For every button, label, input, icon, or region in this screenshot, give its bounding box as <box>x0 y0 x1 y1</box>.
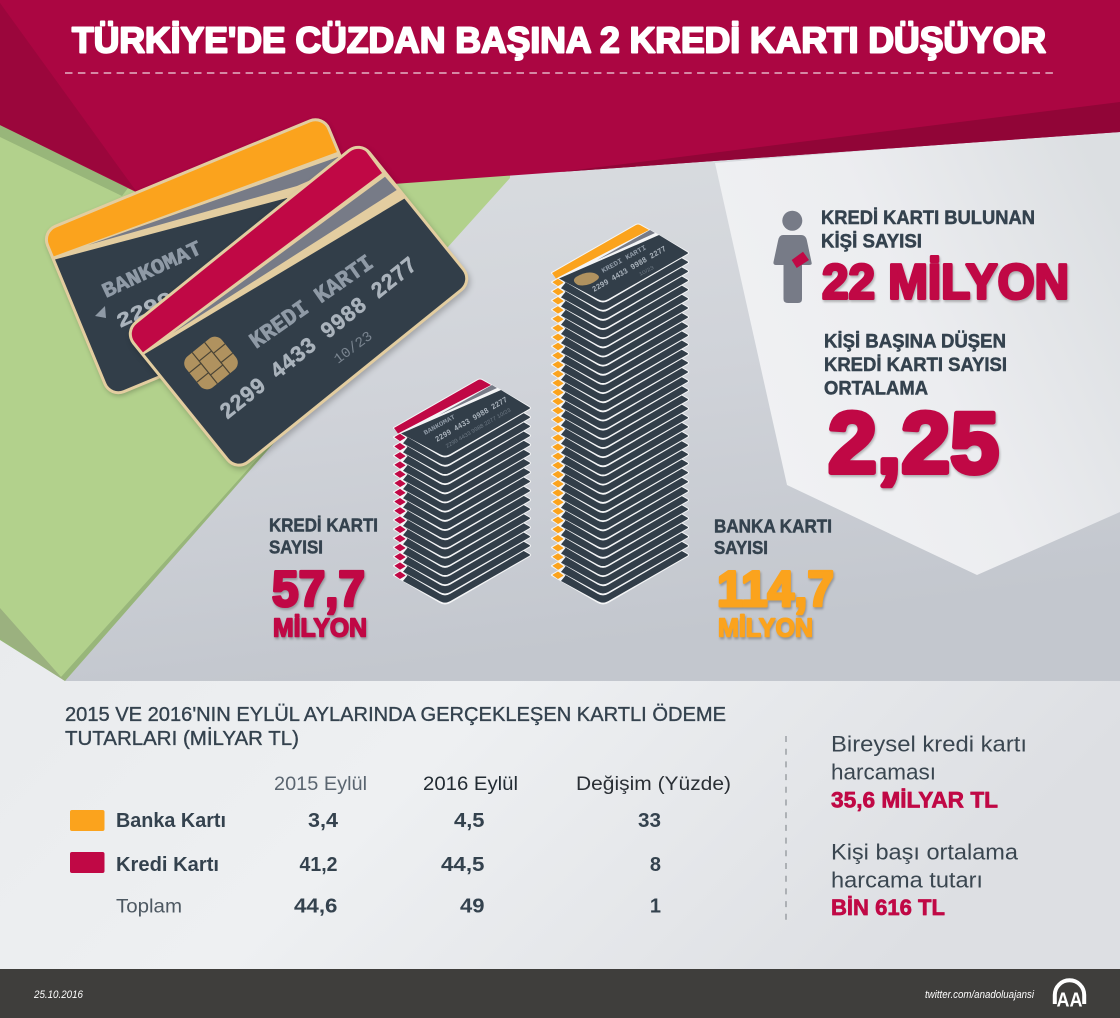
table: card payments: 2016 Eylül <box>423 774 518 795</box>
block: credit card count: SAYISI <box>269 536 323 558</box>
table: card payments: 4,5 <box>454 810 484 832</box>
block: individual credit card spending: 35,6 MİLYAR TL <box>831 788 998 812</box>
block: bank card count: SAYISI <box>714 537 768 558</box>
table: card payments: 8 <box>650 854 661 876</box>
illustration: credit card (red) <box>128 146 472 472</box>
top card of credit stack: 2299 4433 9988 2277 10/23 <box>445 408 512 450</box>
block: cards per person: KREDİ KARTI SAYISI <box>824 353 1007 376</box>
table: card payments: 41,2 <box>300 854 338 876</box>
block: cards per person: 2,25 <box>828 396 999 492</box>
block: average spending per person: BİN 616 TL <box>831 895 945 920</box>
block: credit card count <box>269 514 378 642</box>
block: cardholders: 22 MİLYON <box>822 256 1069 310</box>
top card of credit stack: 2299 4433 9988 2277 <box>434 396 510 445</box>
heading: payments table: 2015 VE 2016'NIN EYLÜL AYLARINDA GERÇEKLEŞEN KARTLI ÖDEME <box>65 704 726 726</box>
block: bank card count: BANKA KARTI <box>714 516 832 536</box>
block: individual credit card spending <box>831 732 1027 812</box>
table: card payments: Toplam <box>116 896 182 918</box>
block: average spending per person: Kişi başı ortalama <box>831 840 1019 864</box>
background: green polygon <box>0 122 512 681</box>
block: bank card count: 114,7 <box>717 561 834 617</box>
block: credit card count: 57,7 <box>272 561 365 617</box>
card chip <box>181 333 241 393</box>
chart: bank card stack <box>552 224 688 604</box>
icon: agency logo <box>1055 980 1084 1012</box>
icon: agency logo: AA <box>1056 990 1082 1012</box>
footer bar <box>0 969 1120 1018</box>
top card of credit stack: BANKOMAT <box>423 414 457 437</box>
block: cards per person: KİŞİ BAŞINA DÜŞEN <box>824 330 1006 352</box>
table: card payments: 44,5 <box>441 854 484 876</box>
legend swatch: credit card <box>70 852 104 873</box>
top card of bank stack: 10/23 <box>638 265 655 278</box>
block: cards per person <box>824 330 1007 492</box>
background: lower light panel <box>0 630 1120 970</box>
block: credit card count: MİLYON <box>273 612 367 642</box>
table: card payments: 2015 Eylül <box>274 774 367 795</box>
heading: payments table: TUTARLARI (MİLYAR TL) <box>65 727 299 750</box>
top card of bank stack: 2299 4433 9988 2277 <box>591 245 668 295</box>
title: TÜRKİYE'DE CÜZDAN BAŞINA 2 KREDİ KARTI DÜŞÜYOR <box>72 20 1046 60</box>
block: cardholders <box>821 206 1069 310</box>
table: card payments: Değişim (Yüzde) <box>576 774 731 795</box>
block: cardholders: KİŞİ SAYISI <box>821 230 922 252</box>
illustration: bank card (orange): 2299 <box>113 288 177 334</box>
background: grey middle area <box>0 120 1120 685</box>
table: card payments: 44,6 <box>294 896 338 918</box>
table: card payments: 1 <box>650 896 661 918</box>
top card of bank stack <box>552 224 688 302</box>
top card of credit stack <box>394 380 530 456</box>
illustration: bank card (orange): BANKOMAT <box>99 238 206 304</box>
block: individual credit card spending: Bireysel kredi kartı <box>831 732 1027 756</box>
block: bank card count <box>714 516 834 642</box>
illustration: credit card (red): 10/23 <box>331 329 376 368</box>
icon: person holding card <box>773 211 812 303</box>
top card of bank stack: KREDI KARTI <box>601 244 648 276</box>
block: average spending per person <box>831 840 1019 920</box>
block: average spending per person: harcama tutarı <box>831 868 983 892</box>
block: individual credit card spending: harcaması <box>831 760 936 784</box>
table: card payments: 49 <box>460 896 484 918</box>
table: card payments <box>70 774 731 918</box>
heading: payments table <box>65 704 726 750</box>
chart: credit card stack <box>394 380 530 604</box>
block: bank card count: MİLYON <box>718 612 813 642</box>
header: crimson banner <box>0 0 1120 192</box>
panel: light polygon behind key figures <box>715 130 1120 575</box>
footer handle: twitter.com/anadoluajansi <box>925 989 1034 1001</box>
legend swatch: bank card <box>70 810 104 831</box>
block: cardholders: KREDİ KARTI BULUNAN <box>821 206 1035 229</box>
illustration: bank card (orange) <box>44 118 342 398</box>
table: card payments: Banka Kartı <box>116 810 226 832</box>
illustration: credit card (red): KREDI KARTI <box>245 250 379 355</box>
illustration: credit card (red): 2299 4433 9988 2277 <box>215 252 423 425</box>
block: cards per person: ORTALAMA <box>824 378 928 400</box>
block: credit card count: KREDİ KARTI <box>269 514 378 536</box>
table: card payments: 33 <box>638 810 661 832</box>
table: card payments: Kredi Kartı <box>116 854 219 876</box>
footer date: 25.10.2016 <box>33 989 84 1001</box>
title dashed rule <box>65 72 1056 74</box>
table: card payments: 3,4 <box>308 810 339 832</box>
